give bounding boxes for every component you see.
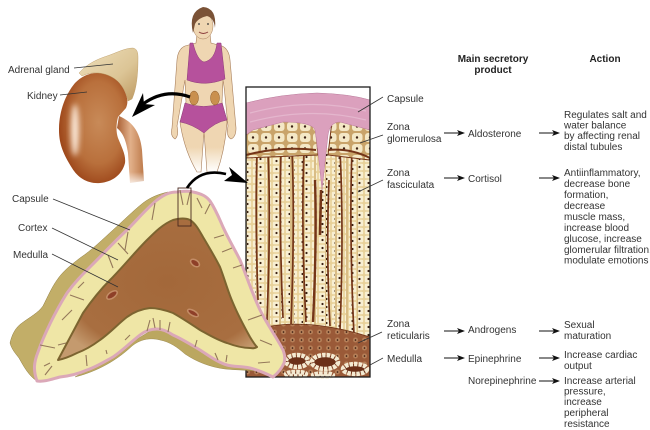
kidney body	[59, 73, 127, 183]
action: aldosterone: by affecting renal	[564, 131, 640, 142]
selection box	[178, 188, 191, 226]
action: cortisol	[564, 168, 650, 266]
labels: zones: Capsule	[387, 94, 424, 105]
labels: zones: Medulla	[387, 354, 422, 365]
labels: kidney: Kidney	[27, 91, 58, 102]
adrenal cross-section	[10, 188, 285, 381]
action: cortisol: formation,	[564, 190, 608, 201]
heading: main secretory product: Main secretory	[458, 54, 529, 65]
action: cortisol: muscle mass,	[564, 212, 625, 223]
small kidneys	[190, 91, 220, 105]
arrow: section to detail	[187, 167, 248, 188]
action: epinephrine: Increase cardiac	[564, 350, 637, 361]
action: norepinephrine: resistance	[564, 419, 610, 430]
zona reticularis	[246, 324, 370, 377]
adrenal gland	[79, 48, 138, 101]
action: cortisol: decrease	[564, 201, 606, 212]
action: cortisol: glomerular filtration,	[564, 245, 650, 256]
heading: main secretory product: product	[474, 65, 512, 76]
labels: kidney	[8, 64, 113, 102]
labels: zones	[358, 94, 442, 365]
labels: zones: Zona	[387, 319, 410, 330]
arrow: woman to kidney	[132, 93, 190, 117]
detail panel: cell layers	[246, 87, 370, 377]
labels: zones: reticularis	[387, 331, 430, 342]
action: epinephrine: output	[564, 361, 592, 372]
action: aldosterone: Regulates salt and	[564, 110, 647, 121]
labels: cross-section	[12, 194, 130, 287]
labels: cross-section: Medulla	[13, 250, 48, 261]
secretory products: Aldosterone	[468, 129, 522, 140]
action: aldosterone: water balance	[563, 120, 627, 132]
labels: zones: fasciculata	[387, 180, 435, 191]
action: norepinephrine	[564, 376, 636, 430]
septa	[40, 190, 272, 375]
woman briefs	[180, 103, 227, 133]
ureter	[117, 116, 144, 183]
outer fat, lower side	[75, 325, 255, 377]
labels: kidney: Adrenal gland	[8, 65, 70, 76]
action: aldosterone	[563, 110, 647, 153]
medulla cell clusters	[286, 355, 367, 376]
capsule	[246, 93, 370, 190]
action: cortisol: increase blood	[564, 223, 629, 234]
action: norepinephrine: peripheral	[564, 408, 608, 419]
labels: zones: Zona	[387, 122, 410, 133]
secretory products: Androgens	[468, 325, 516, 336]
zona glomerulosa	[246, 120, 370, 160]
labels: cross-section: Cortex	[18, 223, 47, 234]
action: cortisol: decrease bone	[564, 179, 631, 190]
secretory products: Norepinephrine	[468, 376, 537, 387]
secretory products: Epinephrine	[468, 354, 522, 365]
action: cortisol: Antiinflammatory,	[564, 168, 641, 179]
medullary veins	[105, 258, 201, 318]
outer fat, left side	[10, 192, 168, 381]
heading: main secretory product	[458, 54, 529, 76]
action: aldosterone: distal tubules	[564, 142, 622, 153]
arrows: product and action	[444, 130, 560, 384]
pink capsule and cortex	[34, 191, 285, 381]
action: norepinephrine: Increase arterial	[564, 376, 636, 387]
woman top	[187, 43, 225, 83]
woman head	[192, 7, 215, 39]
panel border	[246, 87, 370, 377]
zona fasciculata	[246, 148, 370, 338]
action: androgens	[564, 320, 611, 342]
figure: woman with kidneys	[171, 7, 236, 172]
secretory products: Cortisol	[468, 174, 502, 185]
labels: zones: Zona	[387, 168, 410, 179]
medulla	[58, 218, 257, 360]
action: epinephrine	[564, 350, 637, 372]
action: norepinephrine: pressure,	[564, 386, 606, 398]
labels: cross-section: Capsule	[12, 194, 49, 205]
secretory products	[468, 129, 537, 387]
action: androgens: maturation	[564, 331, 611, 342]
action: cortisol: glucose, increase	[564, 234, 642, 245]
fasciculata columns	[256, 150, 354, 335]
labels: zones: glomerulosa	[387, 134, 442, 145]
action: androgens: Sexual	[564, 320, 595, 331]
heading: action: Action	[589, 54, 621, 65]
action: norepinephrine: increase	[564, 397, 602, 408]
action: cortisol: modulate emotions	[564, 256, 648, 266]
kidney illustration	[59, 48, 148, 187]
